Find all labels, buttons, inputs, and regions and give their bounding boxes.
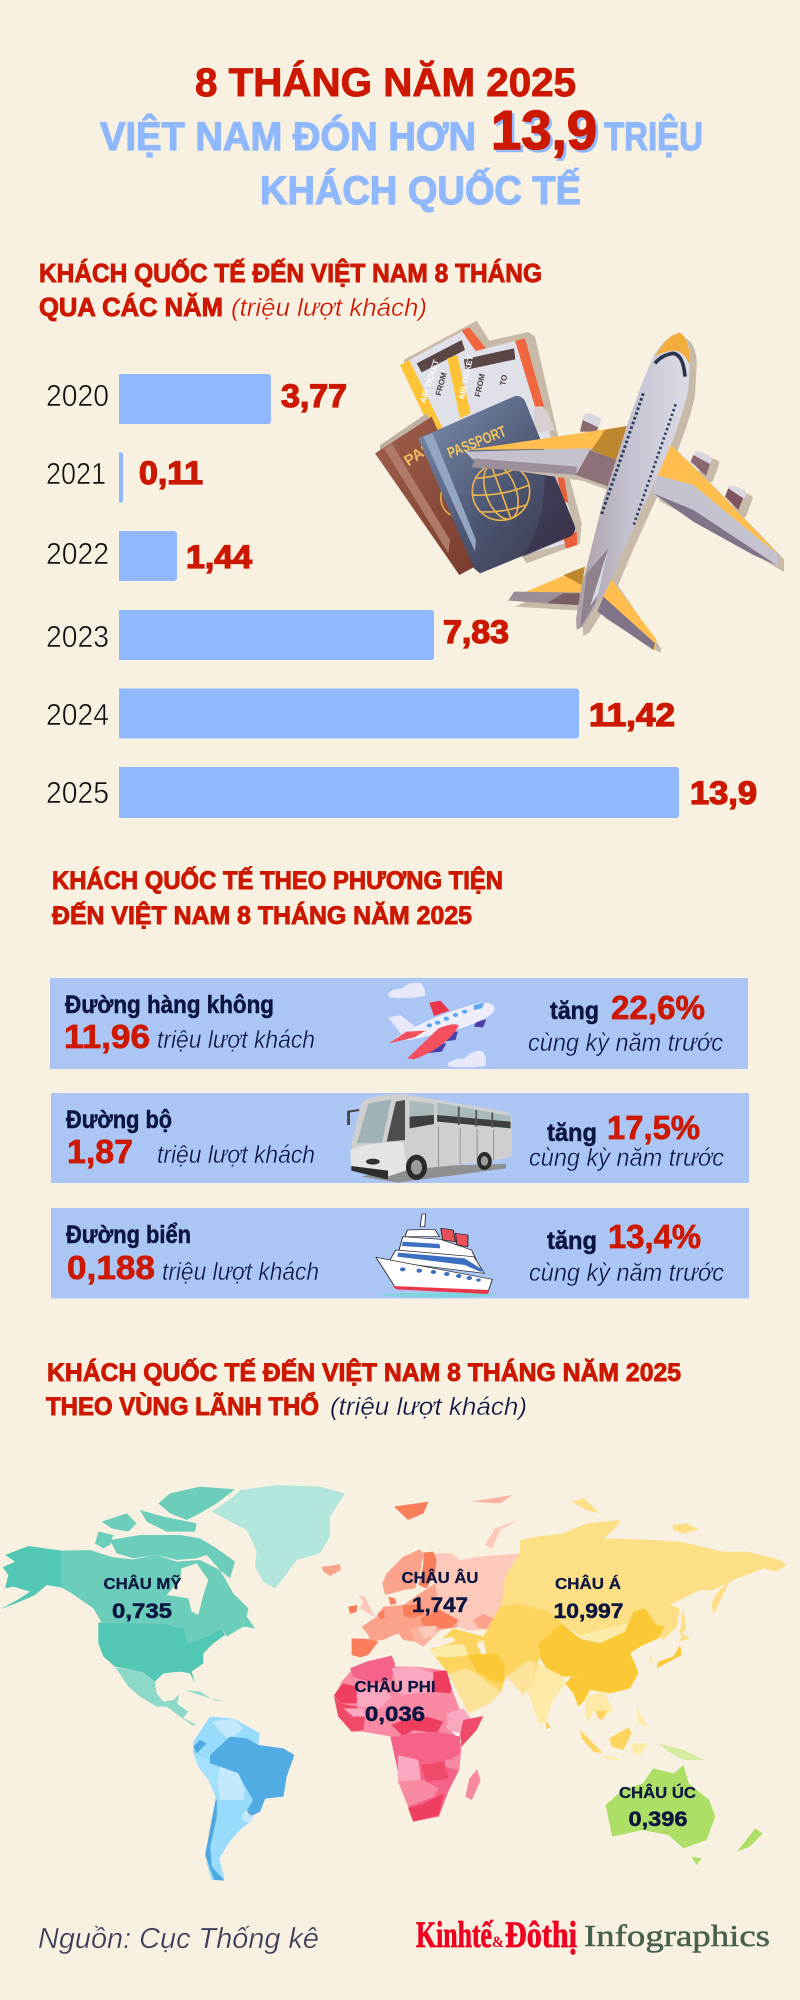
heading: visitors by year bbox=[39, 258, 542, 322]
panel: by road: triệu lượt khách bbox=[157, 1141, 315, 1169]
panel: by sea: Đường biển bbox=[66, 1221, 191, 1249]
region: Middle East and Central Asia bbox=[430, 1607, 540, 1713]
heading: visitors by region: THEO VÙNG LÃNH THỔ bbox=[46, 1391, 319, 1421]
panel: by air: 22,6% bbox=[611, 989, 705, 1026]
bar 2021: 0,11 bbox=[139, 455, 203, 491]
left wing bbox=[465, 426, 627, 487]
bar 2025: 13,9 bbox=[690, 775, 757, 811]
panel: by air: 11,96 bbox=[64, 1018, 150, 1055]
title: 13,9 bbox=[491, 99, 597, 161]
panel: by road: tăng bbox=[547, 1119, 597, 1147]
heading: visitors by transport: KHÁCH QUỐC TẾ THEO PHƯƠNG TIỆN bbox=[52, 865, 503, 895]
panel: by air: Đường hàng không bbox=[65, 991, 274, 1019]
panel: by road: Đường bộ bbox=[66, 1106, 172, 1134]
logo: Infographics bbox=[584, 1918, 770, 1953]
icon: blue passport bbox=[418, 396, 575, 573]
label: Africa bbox=[354, 1677, 436, 1726]
world map bbox=[0, 1485, 787, 1881]
plane shadow bbox=[479, 339, 784, 653]
bar 2022: 2022 bbox=[46, 536, 109, 571]
region: Europe bbox=[322, 1549, 520, 1657]
region: Africa bbox=[390, 1733, 481, 1822]
bar 2022: 1,44 bbox=[186, 539, 252, 575]
logo: Đôthị bbox=[505, 1915, 577, 1956]
engines right bbox=[691, 451, 746, 510]
panel: by sea: cùng kỳ năm trước bbox=[529, 1259, 724, 1287]
heading: visitors by region: KHÁCH QUỐC TẾ ĐẾN VIỆT NAM 8 THÁNG NĂM 2025 bbox=[47, 1357, 681, 1387]
heading: visitors by year: QUA CÁC NĂM bbox=[39, 292, 223, 322]
title: VIỆT NAM ĐÓN HƠN bbox=[100, 113, 476, 159]
icon: bus bbox=[349, 1094, 512, 1183]
panel: by sea bbox=[51, 1208, 749, 1298]
icon: cruise ship bbox=[376, 1214, 496, 1297]
panel: by road: cùng kỳ năm trước bbox=[529, 1144, 724, 1172]
bar 2020: 3,77 bbox=[281, 378, 347, 414]
region: Oceania bbox=[606, 1743, 763, 1865]
heading: visitors by year: (triệu lượt khách) bbox=[231, 294, 427, 322]
panel: by sea: tăng bbox=[547, 1227, 597, 1255]
label: Oceania: CHÂU ÚC bbox=[619, 1783, 696, 1802]
bar 2021: 2021 bbox=[46, 456, 106, 491]
panel: by road: 1,87 bbox=[67, 1133, 133, 1170]
bar 2025: 2025 bbox=[46, 775, 109, 810]
logo bbox=[416, 1915, 770, 1956]
label: Asia: 10,997 bbox=[554, 1599, 624, 1623]
label: Americas: CHÂU MỸ bbox=[104, 1573, 182, 1593]
illustration: airplane with passports and tickets bbox=[375, 321, 784, 653]
panel: by road bbox=[51, 1093, 749, 1183]
icon: brown passport bbox=[375, 413, 493, 575]
bar 2024 bbox=[46, 688, 675, 738]
panel: by air: triệu lượt khách bbox=[157, 1026, 315, 1054]
label: Asia bbox=[554, 1574, 624, 1623]
windows bbox=[602, 393, 643, 514]
heading: visitors by region bbox=[46, 1357, 681, 1421]
bar 2023 bbox=[46, 610, 509, 660]
panel: by sea: triệu lượt khách bbox=[162, 1258, 319, 1286]
logo: & bbox=[492, 1934, 504, 1951]
panel: by air bbox=[50, 978, 748, 1069]
engine left bbox=[580, 413, 602, 432]
icon: blue passport: PASSPORT bbox=[445, 423, 509, 462]
icon: gold globe bbox=[472, 460, 530, 524]
icon: boarding tickets: AIR TICKET bbox=[418, 358, 441, 404]
label: Americas: 0,735 bbox=[112, 1599, 172, 1623]
icon: boarding tickets: TO bbox=[498, 374, 509, 386]
title: 8 THÁNG NĂM 2025 bbox=[195, 60, 576, 105]
fuselage bbox=[576, 333, 690, 630]
icon: brown passport: PAS bbox=[401, 439, 436, 470]
region: Asia bbox=[500, 1520, 787, 1761]
panel: by air: cùng kỳ năm trước bbox=[528, 1029, 723, 1057]
bar 2024: 2024 bbox=[46, 697, 109, 732]
panel: by road: 17,5% bbox=[607, 1109, 700, 1146]
bar 2020 bbox=[46, 374, 347, 424]
panel: by sea: 13,4% bbox=[608, 1218, 701, 1255]
title: 13,9 bbox=[494, 102, 600, 164]
bar 2021 bbox=[46, 452, 203, 502]
logo: Kinhtế bbox=[416, 1915, 494, 1956]
tail fin bbox=[580, 548, 608, 628]
heading: visitors by region: (triệu lượt khách) bbox=[330, 1393, 527, 1421]
bar 2023: 2023 bbox=[46, 619, 109, 654]
bar 2020: 2020 bbox=[46, 378, 109, 413]
heading: visitors by transport: ĐẾN VIỆT NAM 8 THÁNG NĂM 2025 bbox=[52, 900, 472, 930]
bar 2023: 7,83 bbox=[443, 614, 509, 650]
label: Asia: CHÂU Á bbox=[555, 1574, 621, 1593]
region: Arctic islands bbox=[394, 1495, 699, 1548]
icon: boarding tickets: AIR TICKET bbox=[457, 355, 475, 400]
bar 2024: 11,42 bbox=[589, 697, 675, 733]
label: Europe bbox=[402, 1568, 478, 1617]
label: Europe: CHÂU ÂU bbox=[402, 1568, 478, 1587]
icon: boarding tickets: FROM bbox=[434, 371, 449, 397]
icon: boarding tickets: FROM bbox=[473, 373, 487, 398]
title bbox=[100, 60, 703, 213]
label: Europe: 1,747 bbox=[412, 1593, 468, 1617]
bar 2022 bbox=[46, 531, 252, 581]
region: Americas bbox=[0, 1485, 345, 1800]
label: Oceania: 0,396 bbox=[628, 1807, 688, 1831]
title: TRIỆU bbox=[604, 113, 703, 159]
label: Africa: 0,036 bbox=[365, 1702, 425, 1726]
region: South America lower bbox=[205, 1770, 283, 1881]
tail stabilizers bbox=[508, 567, 657, 650]
icon: airplane bbox=[388, 983, 495, 1067]
title: KHÁCH QUỐC TẾ bbox=[260, 167, 581, 213]
panel: by sea: 0,188 bbox=[67, 1249, 155, 1286]
region: North Africa bbox=[334, 1656, 483, 1760]
bar chart: visitors by year bbox=[46, 374, 757, 818]
heading: visitors by year: KHÁCH QUỐC TẾ ĐẾN VIỆT NAM 8 THÁNG bbox=[39, 258, 542, 288]
icon: airplane bbox=[465, 333, 784, 653]
nose bbox=[655, 333, 690, 366]
panel: by air: tăng bbox=[550, 997, 599, 1025]
heading: visitors by transport bbox=[52, 865, 503, 930]
label: Oceania bbox=[619, 1783, 696, 1831]
label: Americas bbox=[104, 1573, 182, 1623]
icon: boarding tickets bbox=[400, 321, 582, 563]
bar 2025 bbox=[46, 767, 757, 818]
source note: Nguồn: Cục Thống kê bbox=[38, 1923, 319, 1955]
label: Africa: CHÂU PHI bbox=[354, 1677, 436, 1696]
right wing bbox=[653, 441, 777, 566]
